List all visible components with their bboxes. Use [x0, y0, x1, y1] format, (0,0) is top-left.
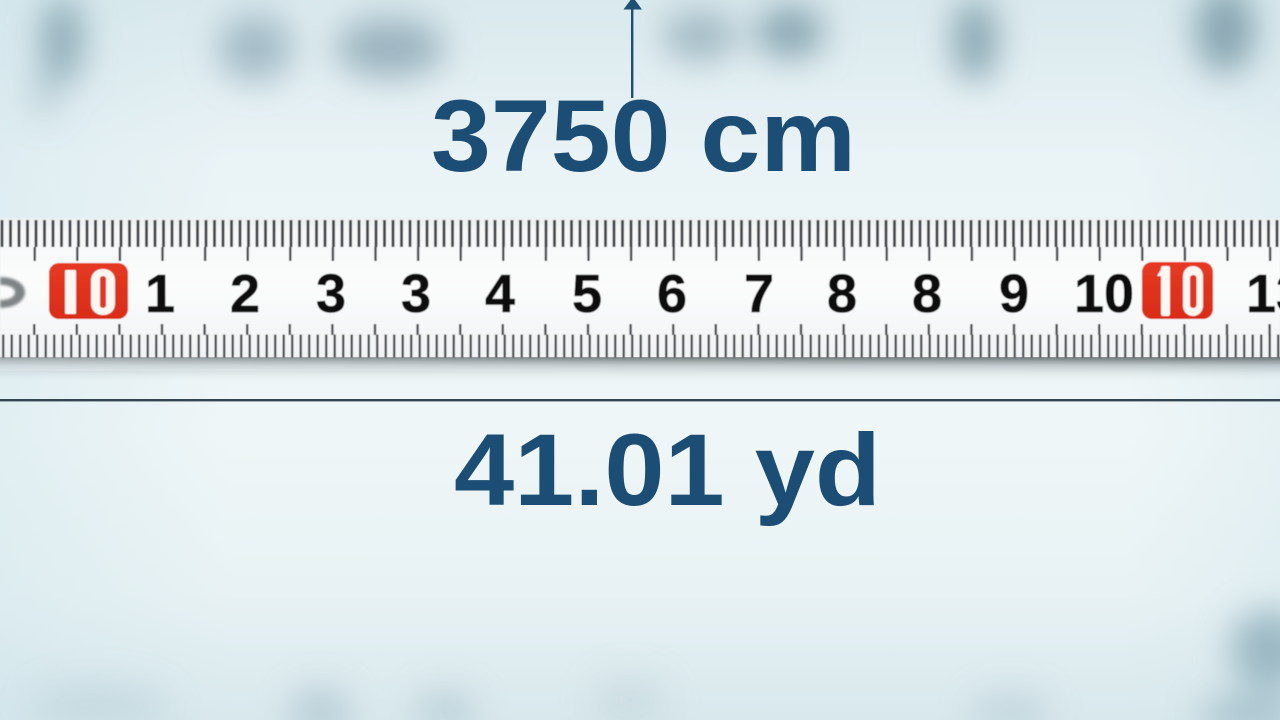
tape numbers: 5	[572, 264, 602, 324]
tape numbers: 8	[912, 264, 942, 324]
tape numbers: 1	[145, 264, 175, 324]
partial ring at left edge	[0, 277, 25, 308]
tape numbers: 3	[401, 264, 431, 324]
value: 3750 cm: 3750 cm	[431, 79, 856, 193]
tape numbers	[145, 264, 1280, 324]
tape numbers: 7	[744, 264, 774, 324]
tape numbers: 9	[999, 264, 1029, 324]
tape numbers: 2	[230, 264, 260, 324]
blurred background shapes: bottom	[30, 610, 1280, 720]
red marker right	[1142, 262, 1213, 319]
top tick marks	[0, 234, 1280, 254]
value: 41.01 yd: 41.01 yd	[454, 413, 881, 527]
arrow pointing up	[624, 0, 642, 98]
blurred background shapes: top	[33, 0, 1255, 119]
red marker left	[49, 263, 128, 319]
tape numbers: 8	[827, 264, 857, 324]
tape numbers: 10	[1074, 264, 1134, 324]
tape shadow	[0, 357, 1280, 381]
tape numbers: 4	[485, 264, 515, 324]
tape numbers: 3	[316, 264, 346, 324]
bottom tick marks	[2, 330, 1280, 346]
measuring tape	[0, 218, 1280, 357]
tape numbers: 6	[657, 264, 687, 324]
divider line	[0, 399, 1280, 401]
tape body	[0, 218, 1280, 357]
